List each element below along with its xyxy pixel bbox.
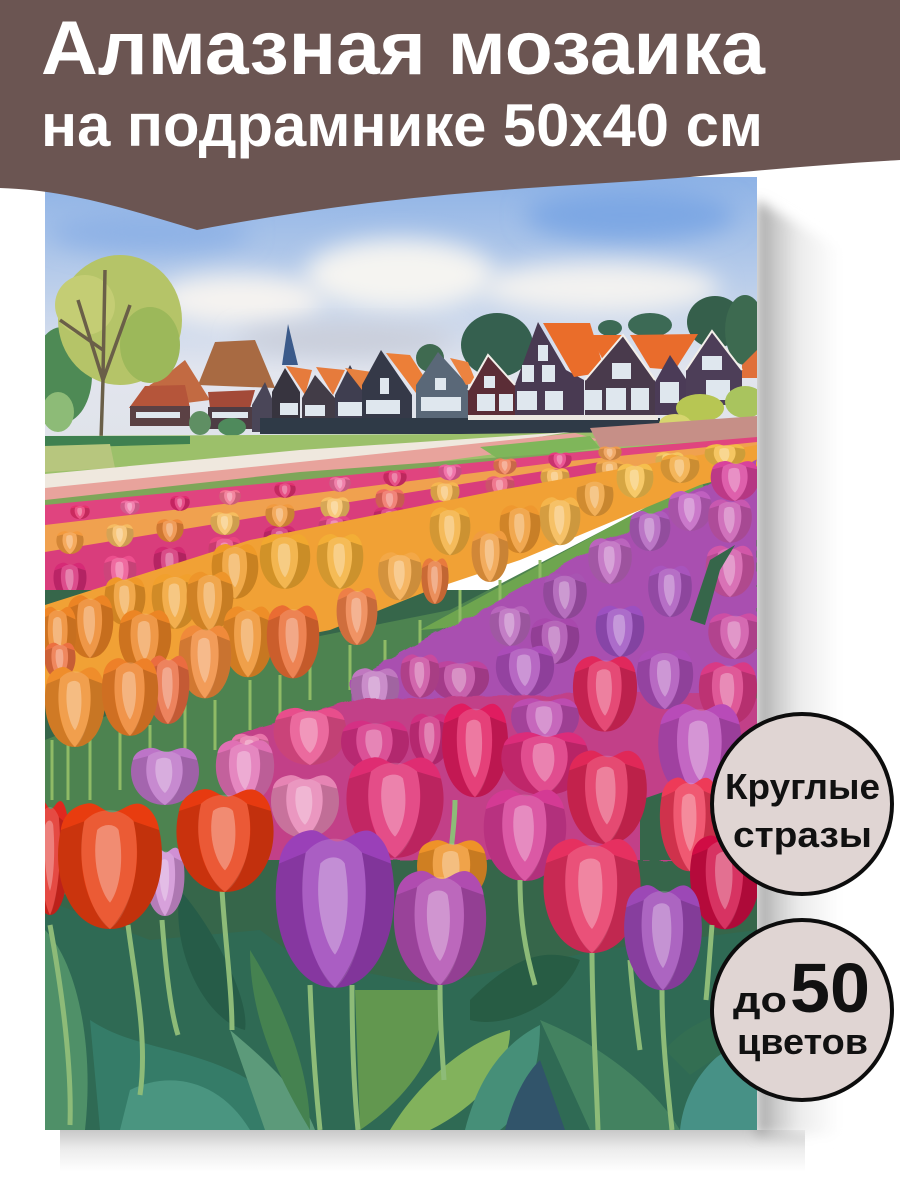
painting: tulip field with Dutch village bbox=[31, 177, 765, 1130]
windows bbox=[136, 345, 730, 418]
sky with clouds bbox=[45, 177, 757, 437]
header banner bbox=[0, 0, 900, 230]
title line 2: на подрамнике 50х40 см bbox=[41, 92, 763, 159]
orange and yellow tulip row bbox=[40, 444, 757, 747]
large front tulips bbox=[31, 789, 702, 990]
bushes bbox=[189, 386, 765, 436]
badge: round rhinestones: Круглые bbox=[725, 766, 880, 807]
village houses bbox=[129, 322, 757, 434]
white gable trim bbox=[468, 331, 742, 390]
foreground leaves and stems bbox=[45, 800, 757, 1130]
far tulip dabs bbox=[53, 446, 685, 599]
title line 1: Алмазная мозаика bbox=[41, 6, 766, 91]
badge: round rhinestones bbox=[712, 714, 892, 894]
shop fronts bbox=[260, 418, 660, 434]
background trees bbox=[416, 295, 765, 377]
badge: up to 50 colors: 50 bbox=[790, 949, 870, 1027]
pink middle tulips bbox=[131, 650, 760, 929]
badge: up to 50 colors: цветов bbox=[737, 1021, 868, 1062]
badge: up to 50 colors: до bbox=[733, 979, 787, 1020]
badge: up to 50 colors bbox=[712, 920, 892, 1100]
badge: round rhinestones: стразы bbox=[733, 814, 872, 855]
tree on the left bbox=[45, 255, 182, 436]
ground, paths and far flower rows bbox=[45, 416, 757, 590]
purple tulip row bbox=[350, 460, 757, 702]
dark green stem field bbox=[45, 482, 757, 985]
canvas side and drop shadow bbox=[60, 200, 840, 1172]
